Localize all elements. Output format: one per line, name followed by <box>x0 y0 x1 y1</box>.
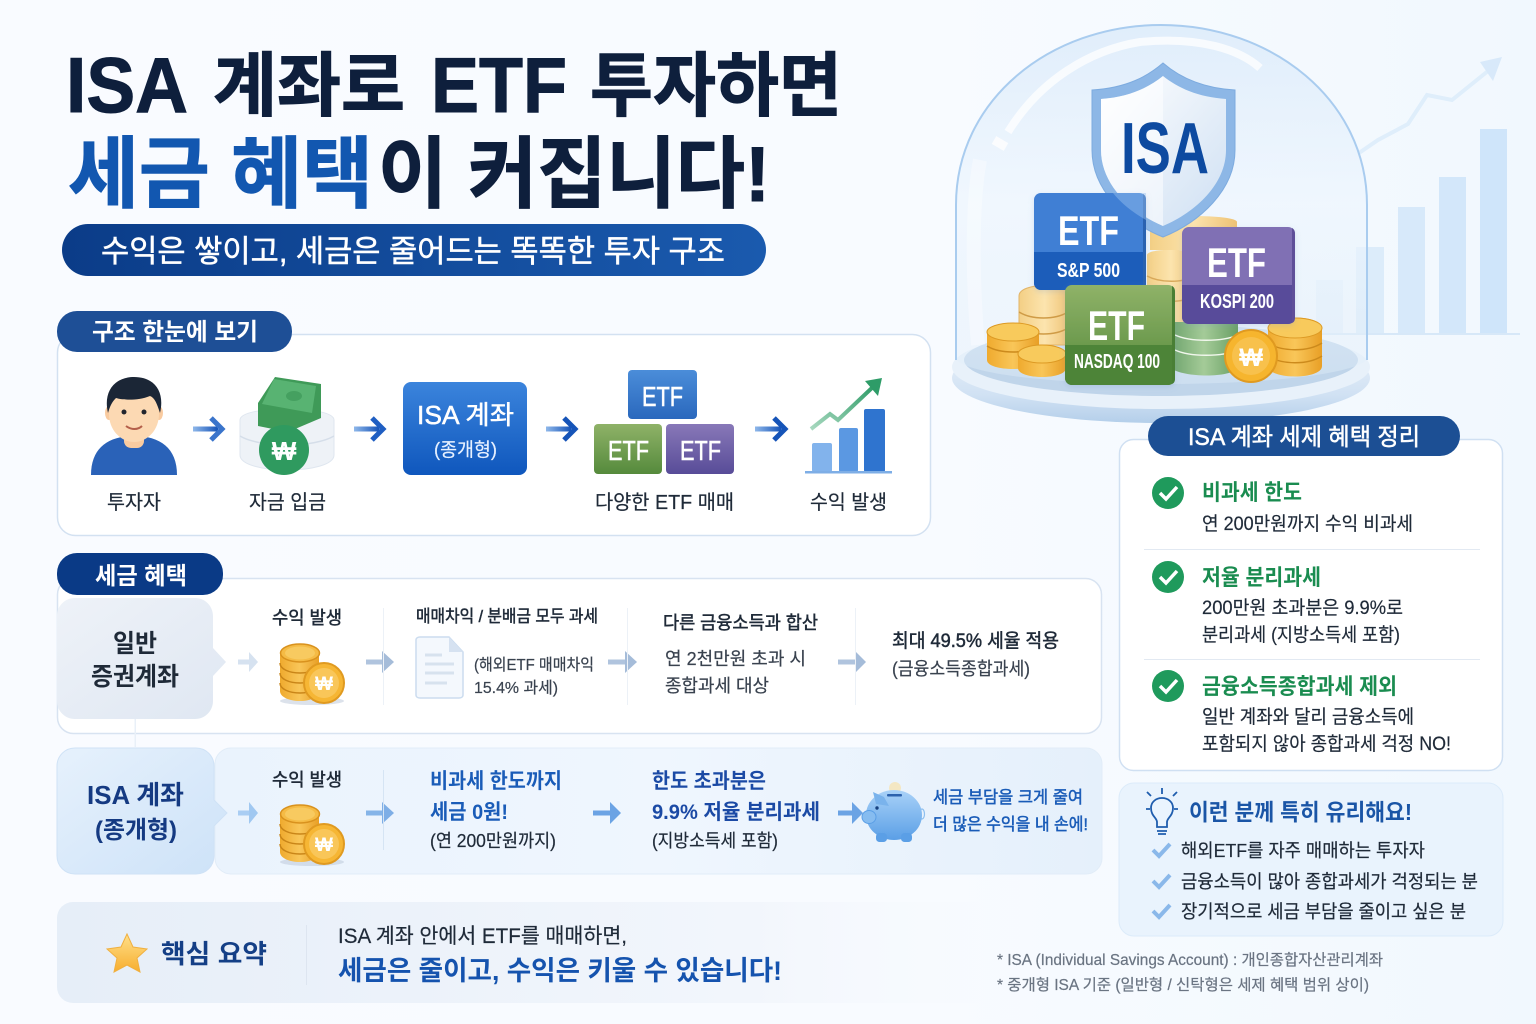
arrow <box>193 418 222 440</box>
panel: who benefits: 장기적으로 세금 부담을 줄이고 싶은 분 <box>1181 901 1466 922</box>
panel: tax benefit summary: 200만원 초과분은 9.9%로 <box>1202 597 1403 619</box>
panel: who benefits: 이런 분께 특히 유리해요! <box>1189 799 1412 825</box>
icon: check <box>1153 905 1170 917</box>
panel: tax benefit summary: 일반 계좌와 달리 금융소득에 <box>1202 706 1414 728</box>
subtitle pill <box>62 224 766 276</box>
glass dome outline <box>956 25 1367 360</box>
illustration: ISA glass dome <box>952 25 1370 423</box>
icon: coins <box>280 644 344 705</box>
panel: ISA account row: 세금 0원! <box>430 801 508 824</box>
panel: tax benefit summary: 금융소득종합과세 제외 <box>1202 674 1397 699</box>
background growth chart <box>1300 57 1520 335</box>
node: ISA account: ISA 계좌 <box>417 400 514 430</box>
shield <box>1092 63 1235 237</box>
ETF block: NASDAQ 100: NASDAQ 100 <box>1074 351 1160 373</box>
panel: tax benefit summary: 연 200만원까지 수익 비과세 <box>1202 513 1413 535</box>
arrow <box>546 418 575 440</box>
label: ETF trading: 다양한 ETF 매매 <box>595 491 734 514</box>
panel: regular brokerage row: 연 2천만원 초과 시 <box>665 649 806 669</box>
dome base <box>952 324 1370 423</box>
icon: star <box>107 934 147 972</box>
icon: check 3 <box>1152 670 1184 702</box>
icon: growth chart <box>805 378 892 474</box>
node: ISA account: (종개형) <box>434 439 497 461</box>
node: ISA account <box>403 382 527 475</box>
panel: tax benefit summary: 분리과세 (지방소득세 포함) <box>1202 624 1400 646</box>
ETF block: KOSPI 200: KOSPI 200 <box>1200 291 1274 313</box>
glass dome body <box>956 25 1367 384</box>
icon: check 1 <box>1152 477 1184 509</box>
icon: ETF blocks: ETF <box>642 381 683 412</box>
arrows <box>238 651 866 673</box>
won coin <box>1225 330 1277 382</box>
panel: key summary: ISA 계좌 안에서 ETF를 매매하면, <box>338 925 627 948</box>
title: ETF <box>431 41 567 129</box>
title: 이 커집니다! <box>378 130 770 218</box>
label: deposit: 자금 입금 <box>249 491 326 514</box>
icon: light bulb <box>1146 788 1178 834</box>
icon: coins <box>280 805 344 866</box>
icon: check <box>1153 875 1170 887</box>
icon: ETF blocks: ETF <box>680 435 721 466</box>
panel: ISA account row: 9.9% 저율 분리과세 <box>652 801 820 824</box>
panel: regular brokerage row: (해외ETF 매매차익 <box>474 656 594 674</box>
panel: regular brokerage row: 증권계좌 <box>91 663 179 691</box>
section label: tax benefit <box>57 553 223 595</box>
panel: tax benefit summary: 비과세 한도 <box>1202 480 1302 505</box>
icon: check <box>1153 844 1170 856</box>
panel: ISA account row: 더 많은 수익을 내 손에! <box>933 815 1088 834</box>
icon: check 2 <box>1152 561 1184 593</box>
panel: tax benefit summary: 저율 분리과세 <box>1202 565 1321 590</box>
icon: deposit money <box>240 377 334 475</box>
section label: tax benefit: 세금 혜택 <box>95 563 187 590</box>
panel: who benefits: 해외ETF를 자주 매매하는 투자자 <box>1181 840 1425 861</box>
panel: regular brokerage row: 최대 49.5% 세율 적용 <box>892 630 1059 652</box>
label: investor: 투자자 <box>107 491 161 514</box>
icon: investor <box>91 377 177 475</box>
panel: key summary: 세금은 줄이고, 수익은 키울 수 있습니다! <box>338 956 782 986</box>
panel: tax benefit summary <box>1120 416 1502 770</box>
panel: regular brokerage row: 15.4% 과세) <box>474 679 558 697</box>
footnotes: * 중개형 ISA 기준 (일반형 / 신탁형은 세제 혜택 범위 상이) <box>997 976 1369 994</box>
icon: deposit money: ₩ <box>272 436 297 466</box>
won coin: ₩ <box>1239 344 1263 372</box>
panel: ISA account row: (지방소득세 포함) <box>652 831 778 851</box>
panel: ISA account row: 한도 초과분은 <box>652 770 766 793</box>
panel: tax benefit summary: ISA 계좌 세제 혜택 정리 <box>1188 424 1420 451</box>
footnotes <box>997 951 1383 994</box>
section label: structure <box>57 311 930 536</box>
coin stacks <box>987 216 1322 377</box>
panel: regular brokerage row: 종합과세 대상 <box>665 676 769 696</box>
ETF block: S&P 500: S&P 500 <box>1057 260 1120 282</box>
subtitle pill: 수익은 쌓이고, 세금은 줄어드는 똑똑한 투자 구조 <box>101 234 725 269</box>
ETF block: NASDAQ 100: ETF <box>1088 302 1145 349</box>
panel: regular brokerage row <box>57 578 1102 747</box>
arrows <box>238 802 863 824</box>
panel: regular brokerage row: 수익 발생 <box>272 608 342 628</box>
panel: who benefits <box>1119 783 1503 936</box>
ETF block: NASDAQ 100 <box>1065 285 1175 385</box>
panel: regular brokerage row: 일반 <box>113 630 157 658</box>
title: 투자하면 <box>590 47 842 125</box>
ETF block: S&P 500 <box>1034 193 1146 290</box>
panel: who benefits: 금융소득이 많아 종합과세가 걱정되는 분 <box>1181 871 1478 892</box>
panel: ISA account row: ISA 계좌 <box>87 780 184 810</box>
panel: ISA account row: 비과세 한도까지 <box>430 770 562 793</box>
panel: ISA account row: 수익 발생 <box>272 770 342 790</box>
panel: key summary: 핵심 요약 <box>161 939 267 969</box>
shield: ISA <box>1121 109 1209 189</box>
panel: ISA account row <box>57 748 1102 874</box>
ETF block: KOSPI 200 <box>1182 227 1295 324</box>
panel: tax benefit summary: 포함되지 않아 종합과세 걱정 NO! <box>1202 733 1451 755</box>
panel: ISA account row: (종개형) <box>95 817 177 844</box>
title: 세금 혜택 <box>68 130 373 218</box>
section label: structure: 구조 한눈에 보기 <box>92 319 258 346</box>
ETF block: S&P 500: ETF <box>1058 207 1119 254</box>
dome highlight <box>1008 41 1260 132</box>
panel: ISA account row: (연 200만원까지) <box>430 831 556 851</box>
label: profit: 수익 발생 <box>810 491 887 514</box>
panel: regular brokerage row: (금융소득종합과세) <box>892 659 1030 679</box>
title <box>66 41 842 218</box>
title: ISA <box>66 41 188 129</box>
arrow <box>354 418 383 440</box>
icon: ETF blocks: ETF <box>608 435 649 466</box>
icon: ETF blocks <box>594 370 734 474</box>
footnotes: * ISA (Individual Savings Account) : 개인종합자산관리계좌 <box>997 951 1383 969</box>
panel: key summary <box>57 902 1117 1003</box>
panel: regular brokerage row: 매매차익 / 분배금 모두 과세 <box>416 607 598 626</box>
icon: document <box>416 637 463 698</box>
panel: structure flow <box>58 334 930 536</box>
arrow <box>755 418 785 440</box>
panel: regular brokerage row: 다른 금융소득과 합산 <box>663 613 818 633</box>
panel: ISA account row: 세금 부담을 크게 줄여 <box>933 788 1083 807</box>
icon: piggy bank <box>862 782 924 842</box>
ETF block: KOSPI 200: ETF <box>1207 239 1266 286</box>
title: 계좌로 <box>213 47 405 125</box>
